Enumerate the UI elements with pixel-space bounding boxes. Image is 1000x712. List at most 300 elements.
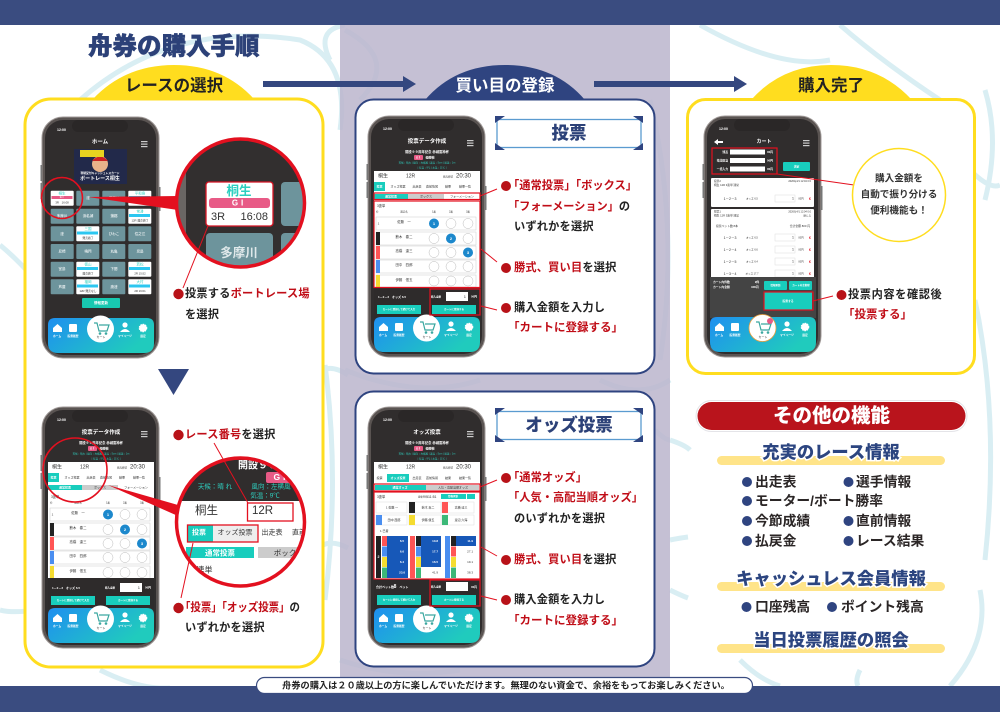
phone: ticket data: 投票履歴 (67, 624, 79, 628)
phone: home screen: カート (96, 334, 106, 339)
phone: ticket: 設定 (466, 333, 472, 337)
phone: odds: 出走表 (412, 475, 422, 480)
list: race info: モーター/ボート勝率 (755, 492, 883, 508)
phone: cart: 900円 (751, 285, 759, 289)
callout: odds types: のいずれかを選択 (514, 511, 606, 525)
footer notice (256, 678, 752, 694)
magnifier: venue card: 3R (211, 211, 225, 223)
phone: ticket: 1 (433, 221, 436, 226)
phone: odds: 鈴木 春二 (422, 504, 434, 510)
phone: ticket: カートに登録する (444, 307, 464, 311)
list: race info: 選手情報 (856, 474, 911, 490)
phone: odds: 購入金額 (431, 584, 441, 588)
phone: cart: € (809, 272, 811, 276)
phone: home screen: マイページ (118, 334, 132, 338)
phone: cart: カート内件数 (713, 280, 730, 284)
phone: cart: 情報更新 (770, 283, 781, 287)
phone: home screen: 住之江 (135, 231, 146, 236)
phone: cart: € (809, 197, 811, 201)
phone: cart: 桐生 12R 3連単 通常 (714, 183, 739, 187)
phone: odds: GⅠ (416, 446, 421, 450)
phone: home screen: 尼崎 (58, 248, 66, 254)
phone: ticket data: 1－2－3 オッズ 6.5 (52, 585, 80, 590)
phone: odds: 投票 (376, 475, 383, 480)
magnifier: race number: オッズ投票 (218, 528, 252, 536)
phone: odds: 6.5 (400, 539, 404, 543)
phone: cart: 合計金額 800 円 (790, 224, 810, 228)
phone: cart: 1－2－4 (724, 248, 736, 252)
phone: odds: 6.6 (400, 550, 404, 554)
heading: odds: オッズ投票 (525, 415, 613, 435)
callout: confirm (836, 287, 942, 321)
phone: ticket: 1－2－3 オッズ 6.5 (378, 294, 406, 299)
phone: cart: 00円 (798, 198, 804, 200)
phone: odds: 10.8 (432, 539, 438, 543)
phone: odds: 27.1 (467, 550, 473, 554)
phone: odds: オッズ投票 (390, 475, 406, 480)
phone: home screen: 大村 (136, 279, 144, 284)
phone: odds: 11:51 (428, 495, 437, 499)
phone: ticket data: 2 (124, 527, 127, 532)
phone: ticket data: 1 (138, 585, 141, 590)
phone: ticket: 00円 (471, 294, 477, 298)
phone: ticket data: 発売締切 (117, 466, 128, 470)
phone: ticket data: 12R (80, 464, 90, 470)
phone: odds: 投票履歴 (393, 624, 405, 628)
phone: ticket: 1 (464, 294, 467, 299)
phone: odds: ベット (399, 585, 409, 589)
phone: odds: 直前情報 (426, 475, 438, 480)
phone: odds: 情報更新 (448, 494, 458, 498)
phone: odds (366, 407, 486, 648)
phone: odds: 合計ベット数 (376, 584, 394, 589)
leader lines (480, 189, 497, 310)
phone: cart: オッズ 6.5 (746, 236, 758, 240)
sub-heading: history: 当日投票履歴の照会 (753, 630, 909, 650)
panel: ticket voting (356, 100, 654, 374)
phone: ticket: 20:30 (456, 174, 472, 180)
phone: home screen: 12:00 (57, 128, 66, 132)
phone: odds: 6.4 (400, 560, 404, 564)
phone: ticket: ボックス (420, 194, 432, 198)
phone: cart: 9件 (755, 280, 759, 284)
phone: odds: マイページ (444, 624, 458, 628)
phone: home screen: 唐津 (110, 284, 118, 289)
phone: cart: 00円 (767, 167, 773, 171)
phone: ticket: 選手名 (400, 210, 408, 214)
list: race info: 払戻金 (755, 532, 797, 548)
phone: odds: 11.9 (467, 539, 473, 543)
magnifier: race number: 投票 (192, 528, 206, 536)
phone: ticket: 12R (406, 174, 416, 180)
phone: home screen: 現場受付キャッシュレスカード (80, 171, 120, 175)
phone: odds: 19.1 (467, 560, 473, 564)
phone: home screen: 津 (86, 195, 90, 200)
phone: odds: 発売締切 (443, 466, 454, 470)
magnifier: race number (43, 438, 310, 591)
list: race info: 出走表 (755, 474, 797, 490)
magnifier: race number: 気温：9℃ (250, 490, 280, 500)
magnifier: race number: 12R (252, 505, 273, 517)
phone: cart: 1 (792, 260, 794, 264)
phone: odds: 23.6 (399, 570, 405, 574)
phone: home screen: ホーム (53, 334, 61, 338)
panel: race selection (25, 99, 323, 667)
phone: cart: 投票2 (714, 179, 721, 183)
phone: home screen: 江戸川 (109, 195, 120, 200)
phone: ticket: 3着 (466, 210, 470, 214)
callout: ticket types: 「通常投票」「ボックス」 (508, 178, 637, 192)
phone: home screen: 津 (60, 231, 64, 236)
phone: cart: 1 (792, 248, 794, 252)
phone: ticket data: 3連単 (51, 494, 60, 499)
phone: ticket data: 3着 (140, 500, 144, 504)
tab: race selection (93, 65, 254, 99)
bubble: auto allocation: 便利機能も！ (870, 204, 928, 216)
phone: home screen: ホーム (92, 138, 109, 146)
phone: odds: 桐生 (378, 464, 388, 470)
list: race info: レース結果 (856, 532, 924, 548)
list: cashless (742, 598, 924, 614)
phone: ticket: 12:00 (383, 127, 392, 131)
phone: ticket: フォーメーション (450, 194, 474, 198)
phone: cart: カート (756, 138, 772, 145)
section: other features (696, 400, 967, 653)
phone: ticket: 直前情報 (426, 184, 438, 188)
phone: cart: 1 (792, 236, 794, 240)
phone: ticket: 結果 (445, 184, 451, 188)
phone: home screen: GⅠ (60, 196, 64, 199)
magnifier: race number: 通常投票 (205, 548, 235, 558)
phone: home screen: 2R 15:52 (134, 272, 146, 276)
heading: ticket: 投票 (552, 123, 586, 143)
phone: ticket data: 1 (107, 512, 110, 517)
phone: ticket data: カート (96, 625, 106, 630)
phone: cart: 00円 (798, 260, 804, 264)
list: race info: 直前情報 (856, 512, 911, 528)
callout: select venue: 投票するボートレース場 (185, 286, 310, 300)
phone: odds: 2 (378, 555, 380, 559)
phone: ticket: | 気温：9℃ | 水温：11℃ | (418, 166, 447, 170)
phone: ticket data: 天候：晴れ | 風向：左横風 | 波高：5cm | 風速：1m (73, 452, 129, 456)
phone: odds: オッズ投票 (413, 428, 441, 436)
phone: home screen: 2R 16:01 (134, 289, 146, 293)
phone: ticket data: 3 (141, 541, 144, 546)
phone: cart: オッズ 6.6 (746, 248, 758, 252)
phone: cart: 00円 (798, 236, 804, 240)
phone: home screen: 情報更新 (94, 300, 108, 305)
phone: ticket: GⅠ (416, 156, 421, 160)
phone: ticket data: 00円 (145, 586, 151, 590)
phone: cart: カート内金額 (713, 285, 730, 289)
phone: ticket: オッズ投票 (390, 184, 406, 188)
bubble: auto allocation: 自動で振り分ける (861, 188, 937, 200)
phone: ticket data: 12:00 (57, 418, 66, 422)
callout: ticket or odds (173, 600, 300, 634)
phone: ticket data: 直前情報 (100, 474, 112, 480)
phone: ticket data: ホーム (53, 624, 61, 628)
phone: ticket data: 桐生 (52, 464, 62, 470)
phone: odds: 更新時間 (418, 494, 429, 498)
phone: odds: 41.9 (432, 570, 438, 574)
phone: ticket: 通常投票 (385, 194, 397, 198)
phone: odds: ホーム (379, 624, 387, 628)
phone: cart: 00円 (767, 150, 773, 154)
phone: odds: 12:00 (383, 418, 392, 422)
phone: odds: 17.7 (432, 550, 438, 554)
phone: odds: 開設９９周年記念 赤城雷神杯 (405, 440, 450, 445)
magnifier: race number: 天候：晴 れ (198, 482, 233, 490)
phone: odds: 16.5 (432, 560, 438, 564)
phone: cart: 2026年4/1 12:04 0:0 (788, 210, 812, 214)
title: 舟券の購入手順 (88, 32, 260, 60)
phone: ticket: 枠 (376, 210, 379, 214)
phone: ticket (366, 116, 486, 357)
phone: ticket: 投票 (376, 184, 383, 188)
phone: ticket: 1 (378, 222, 380, 226)
phone: ticket: ホーム (379, 333, 387, 337)
phone: cart: € (809, 236, 811, 240)
banner: other features: その他の機能 (773, 404, 890, 427)
phone: ticket data: 設定 (140, 624, 146, 628)
phone: ticket data: 1着 (106, 500, 110, 504)
phone: ticket: 高橋 達三 (396, 248, 413, 253)
phone: home screen (40, 117, 160, 358)
phone: home screen: 宮島 (58, 266, 66, 271)
leader lines (480, 480, 497, 600)
phone: odds: 結果 (445, 475, 451, 480)
phone: odds: 20:30 (456, 464, 472, 470)
phone: home screen: 若松 (136, 262, 144, 266)
phone: ticket: 開設９９周年記念 赤城雷神杯 (405, 149, 450, 154)
magnifier: race number: ボック (274, 548, 296, 558)
phone: ticket data (40, 407, 160, 648)
phone: ticket: 購入金額 (431, 294, 441, 298)
phone: odds: カート (422, 625, 432, 630)
phone: cart: 12:00 (719, 127, 728, 131)
footer notice: 舟券の購入は２０歳以上の方に楽しんでいただけます。無理のない資金で、余裕をもってお楽しみください。 (282, 680, 730, 690)
magnifier: race number: GⅠ (273, 472, 289, 482)
phone: ticket: 発売締切 (443, 174, 454, 178)
phone: odds: 8 (394, 584, 397, 590)
tab: purchase complete (751, 65, 912, 100)
phone: ticket data: オッズ投票 (64, 474, 80, 480)
phone: ticket: 田中 四郎 (396, 262, 413, 267)
phone: ticket: 3連単 (377, 203, 386, 208)
callout: ticket types (501, 178, 637, 233)
phone: odds: 00円 (471, 585, 477, 589)
arrow: down (158, 369, 189, 395)
phone: home screen: 鳴門 (84, 248, 92, 254)
phone: home screen: 下関 (110, 266, 118, 271)
phone: home screen: 児島 (136, 248, 144, 254)
phone: home screen: 投票履歴 (67, 334, 79, 338)
phone: ticket: 3 (467, 250, 470, 255)
phone: cart: カート (758, 334, 768, 339)
phone: ticket: 桐生 (378, 172, 388, 180)
phone: ticket data: 出走表 (86, 474, 96, 480)
phone: ticket: カートに登録して続けて入力 (383, 307, 416, 311)
callout: confirm: 投票内容を確認後 (848, 287, 942, 301)
list: cashless: 口座残高 (755, 598, 810, 614)
bubble: auto allocation: 購入金額を (875, 172, 923, 184)
phone: odds: 38.3 (467, 570, 473, 574)
phone: ticket data: カートに登録して続けて入力 (57, 598, 90, 602)
phone: ticket: 伊藤 信五 (396, 277, 413, 282)
phone: ticket data: 鈴木 春二 (70, 525, 87, 530)
phone: odds: 渡辺 六海 (455, 517, 467, 522)
phone: odds: 優勝戦 (425, 446, 435, 450)
phone: ticket: 天候：晴れ | 風向：左横風 | 波高：5cm | 風速：1m (399, 160, 455, 164)
callout: amount (501, 592, 623, 627)
list: race info (742, 474, 924, 548)
phone: ticket data: 伊藤 信五 (70, 568, 87, 573)
callout: ticket types: いずれかを選択 (514, 219, 594, 233)
phone: ticket data: 高橋 達三 (70, 539, 87, 544)
callout: odds types: 「通常オッズ」 (508, 470, 587, 484)
phone: odds: 田中 西郎 (388, 517, 400, 522)
phone: ticket data: フォーメーション (124, 484, 148, 490)
list: cashless: ポイント残高 (841, 598, 924, 614)
callout: confirm: 「投票する」 (843, 307, 912, 321)
leader lines (777, 174, 854, 301)
phone: ticket data: 20:30 (130, 464, 146, 470)
phone: ticket data: 田中 四郎 (70, 553, 87, 558)
callout: ticket types: 「フォーメーション」の (508, 200, 630, 213)
tab: bet registration: 買い目の登録 (456, 76, 555, 95)
phone: ticket data: 佐藤 一 (71, 510, 85, 515)
callout: ticket or odds: 「投票」「オッズ投票」の (180, 600, 300, 614)
phone: cart: 閉じる (803, 214, 811, 218)
phone: ticket: 2 (450, 236, 453, 241)
tab: purchase complete: 購入完了 (798, 76, 864, 95)
phone: ticket data: 通常投票 (59, 484, 71, 490)
sub-heading: cashless: キャッシュレス会員情報 (736, 568, 927, 588)
phone: cart: 00円 (798, 248, 804, 252)
callout: amount (501, 300, 623, 334)
phone: cart: マイページ (780, 333, 794, 337)
phone: ticket data: 選手名 (74, 500, 82, 504)
callout: bet type: 勝式、買い目を選択 (514, 260, 617, 274)
phone: odds: 1 佐藤 一 (386, 504, 398, 510)
phone: ticket: 出走表 (412, 184, 422, 188)
phone: home screen: 発売終了 (82, 236, 94, 240)
tab: race selection: レースの選択 (125, 76, 224, 95)
phone: cart: 設定 (802, 333, 808, 337)
magnifier: race number: 直前 (292, 528, 306, 536)
phone: odds: 通常オッズ (392, 484, 408, 490)
phone: ticket data: 投票データ作成 (82, 428, 121, 436)
phone: cart: 1 (792, 272, 794, 276)
phone: odds: カートに登録して続けて入力 (383, 598, 416, 602)
phone: cart: カート内全削除 (792, 283, 810, 287)
magnifier: race number: 桐生 (195, 503, 218, 517)
phone: cart: オッズ 6.4 (746, 260, 758, 264)
center column background (340, 25, 670, 686)
phone: cart: 1－3－4 (724, 272, 736, 276)
callout: amount: 購入金額を入力し (514, 592, 605, 606)
phone: odds: カートに登録する (444, 598, 464, 602)
phone: odds: 設定 (466, 624, 472, 628)
phone: cart: 桐生 12R 3連単 通常 (714, 214, 739, 218)
magnifier: venue card: 16:08 (240, 211, 268, 223)
phone: home screen: びわこ (109, 231, 119, 236)
phone: home screen: 三国 (84, 226, 92, 231)
phone: cart: € (809, 260, 811, 264)
phone: ticket: 2着 (449, 210, 453, 214)
bottom band (0, 686, 1000, 712)
callout: odds types: 「人気・高配当順オッズ」 (508, 490, 643, 504)
phone: cart: 指導配当 (717, 158, 728, 162)
heading: ticket (495, 116, 643, 150)
phone: ticket data: ボックス (94, 484, 106, 490)
callout: select venue (173, 286, 310, 321)
tab: bet registration (425, 65, 585, 100)
callout: odds types (501, 470, 643, 525)
magnifier: venue card (40, 137, 306, 269)
phone: cart: 投票ベット数 8本 (716, 224, 738, 228)
phone: odds: 3連単 (377, 494, 386, 499)
phone: cart: 投票する (782, 299, 794, 303)
phone: home screen: ボートレース桐生 (80, 175, 120, 182)
phone: cart: オッズ 6.5 (746, 196, 758, 200)
phone: odds: 伊藤 信五 (422, 517, 434, 522)
phone: ticket data: カートに登録する (118, 598, 138, 602)
phone: cart: 1 (792, 196, 794, 200)
magnifier: race number: 開設９９ (238, 460, 278, 472)
callout: race number: レース番号を選択 (185, 427, 276, 441)
phone: cart: オッズ 17.7 (745, 272, 759, 276)
phone: ticket data: | 気温：9℃ | 水温：11℃ | (92, 456, 121, 460)
phone: ticket data: 結果 (119, 474, 125, 480)
callout: amount: 「カートに登録する」 (508, 613, 623, 627)
phone: home screen: 発売終了 (82, 272, 94, 276)
phone: ticket data: 1 (52, 512, 54, 516)
phone: ticket: 投票履歴 (393, 333, 405, 337)
phone: ticket: 結果一覧 (459, 184, 471, 188)
phone: ticket data: 2着 (123, 500, 127, 504)
flow arrow 1 (263, 76, 416, 92)
sub-heading: history (717, 630, 945, 653)
phone: ticket data: GⅠ (90, 446, 95, 450)
phone: cart: 1－2－3 (724, 236, 736, 240)
flow arrow 2 (594, 76, 747, 92)
phone: ticket data: 結果一覧 (133, 474, 145, 480)
phone: ticket: 投票データ作成 (408, 137, 447, 145)
phone: home screen: 2R 15:40 (134, 200, 146, 204)
phone: ticket data: 開設９９周年記念 赤城雷神杯 (79, 440, 124, 445)
phone: ticket: 鈴木 春二 (396, 234, 413, 239)
phone: cart: 一括入力 (717, 167, 728, 171)
phone: ticket: マイページ (444, 333, 458, 337)
bubble: auto allocation (852, 148, 946, 242)
phone: cart: 投票履歴 (729, 333, 741, 337)
phone: ticket data: マイページ (118, 624, 132, 628)
phone: cart: 残高 (722, 150, 728, 154)
magnifier: race number: 3連単 (192, 564, 212, 574)
phone: ticket: 優勝戦 (425, 154, 435, 160)
magnifier: race number: 風向：左横風 (252, 482, 291, 490)
magnifier: venue card: 多摩川 (220, 245, 258, 260)
phone: ticket data: 枠 (50, 500, 53, 504)
list: race info: 今節成績 (755, 512, 810, 528)
phone: odds: 人気・高配当順オッズ (438, 484, 468, 490)
phone: home screen: 常滑 (136, 208, 144, 214)
callout: ticket or odds: いずれかを選択 (185, 620, 265, 634)
phone: odds: | 気温：9℃ | 水温：11℃ | (418, 456, 447, 460)
magnifier: venue card: 桐生 (226, 183, 252, 198)
phone: cart: 00円 (767, 158, 773, 162)
